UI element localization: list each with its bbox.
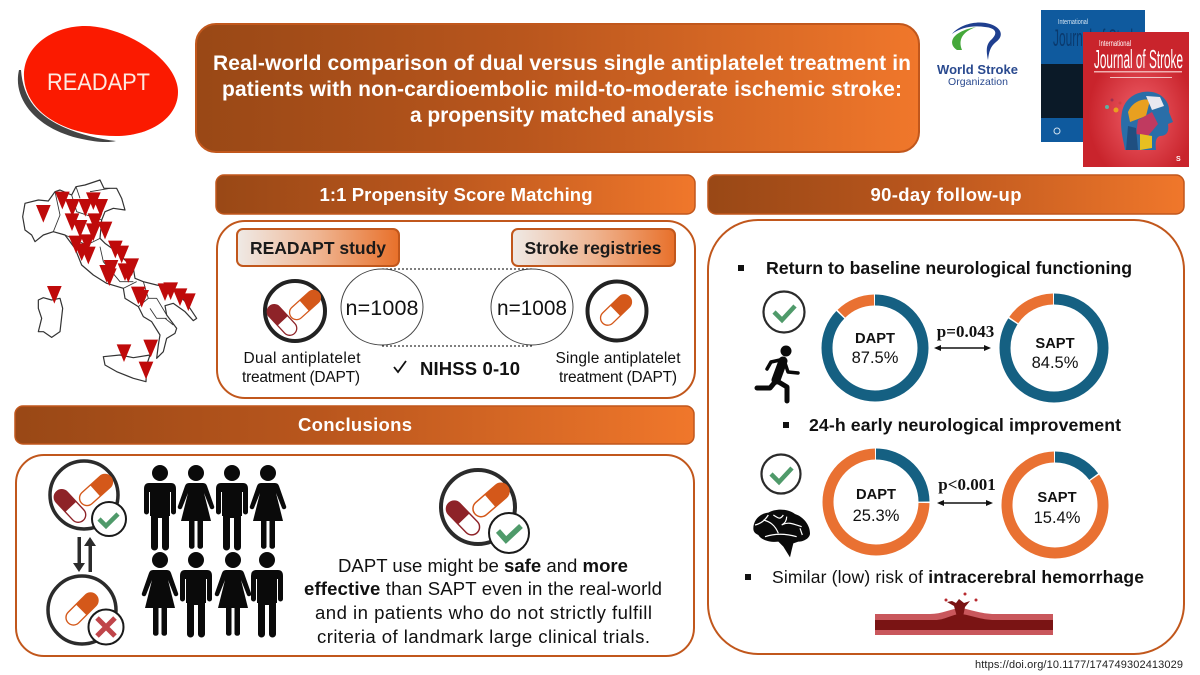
chart: DAPT return to baseline: DAPT bbox=[855, 331, 895, 347]
panel: matching bbox=[217, 221, 695, 398]
label: DAPT: treatment (DAPT) bbox=[242, 369, 360, 386]
icon: runner bbox=[757, 346, 798, 401]
matched cohorts: n=1008 bbox=[497, 297, 567, 320]
outcome heading: early improvement: 24-h early neurological improvement bbox=[809, 415, 1121, 435]
icon: single pill bbox=[588, 282, 646, 340]
tag: READAPT study: READAPT study bbox=[250, 238, 386, 258]
journal cover: red bbox=[1083, 32, 1189, 167]
heading: follow-up: 90-day follow-up bbox=[870, 184, 1022, 205]
conclusion text: DAPT use might be safe and more bbox=[338, 555, 628, 576]
chart: SAPT return to baseline: 84.5% bbox=[1032, 354, 1079, 372]
label: DAPT bbox=[242, 350, 361, 386]
icon: group of patients bbox=[142, 465, 286, 638]
logo: World Stroke Organization: World Stroke bbox=[937, 62, 1018, 77]
icon: vessel hemorrhage bbox=[875, 592, 1053, 635]
icon: check bbox=[762, 454, 800, 494]
heading: conclusions bbox=[15, 406, 694, 444]
map outline bbox=[23, 180, 197, 382]
conclusion text: effective than SAPT even in the real-world bbox=[304, 578, 662, 599]
logo: READAPT bbox=[18, 26, 178, 142]
chart: DAPT early improvement: 25.3% bbox=[853, 507, 900, 525]
DOI reference: https://doi.org/10.1177/174749302413029 bbox=[975, 659, 1183, 671]
heading: conclusions: Conclusions bbox=[298, 414, 412, 435]
journal cover: blue bbox=[1041, 10, 1145, 142]
tag: READAPT study bbox=[237, 229, 399, 266]
icon: dual pills with check bbox=[50, 461, 126, 536]
icon: dual pills with check bbox=[441, 470, 529, 553]
heading: propensity score matching: 1:1 Propensity Score Matching bbox=[320, 184, 592, 205]
label: single antiplatelet: Single antiplatelet bbox=[556, 350, 681, 367]
comparison: p<0.001: p<0.001 bbox=[938, 475, 996, 494]
outcome text: intracerebral hemorrhage: Similar (low) risk of intracerebral hemorrhage bbox=[772, 567, 1144, 587]
matched cohorts: n=1008 bbox=[346, 296, 419, 320]
comparison: p=0.043: p=0.043 bbox=[937, 322, 994, 341]
logo: World Stroke Organization: Organization bbox=[948, 76, 1008, 88]
icon: colourful puzzle head bbox=[1105, 92, 1173, 150]
icon: dual pills bbox=[264, 281, 325, 341]
heading: follow-up bbox=[708, 175, 1184, 214]
label: single antiplatelet bbox=[556, 350, 681, 386]
chart: DAPT early improvement bbox=[828, 454, 924, 550]
icon: single pill with cross bbox=[48, 576, 124, 644]
tag: stroke registries: Stroke registries bbox=[524, 238, 662, 258]
title banner: Real-world comparison of dual versus single antiplatelet treatment in bbox=[213, 52, 911, 75]
logo: READAPT: READAPT bbox=[47, 69, 150, 96]
conclusion text: criteria of landmark large clinical trials. bbox=[317, 626, 650, 647]
comparison: p=0.043 bbox=[934, 322, 994, 351]
panel: conclusions bbox=[16, 455, 694, 656]
journal cover: red: International bbox=[1099, 39, 1131, 48]
conclusion text: and in patients who do not strictly fulfill bbox=[315, 602, 652, 623]
journal cover: blue: International bbox=[1058, 19, 1088, 26]
matched cohorts bbox=[341, 269, 573, 346]
logo: World Stroke Organization bbox=[937, 22, 1018, 88]
chart: SAPT return to baseline: SAPT bbox=[1035, 336, 1075, 352]
chart: SAPT early improvement: 15.4% bbox=[1034, 509, 1081, 527]
chart: DAPT return to baseline: 87.5% bbox=[852, 349, 899, 367]
title banner: patients with non-cardioembolic mild-to-moderate ischemic stroke: bbox=[222, 78, 902, 101]
conclusion text bbox=[304, 555, 662, 647]
chart: SAPT early improvement: SAPT bbox=[1037, 490, 1077, 506]
tag: stroke registries bbox=[512, 229, 675, 266]
heading: propensity score matching bbox=[216, 175, 695, 214]
outcome heading: return to baseline: Return to baseline neurological functioning bbox=[766, 258, 1132, 278]
icon: brain bbox=[753, 510, 810, 557]
map of Italy with centre markers bbox=[23, 180, 197, 382]
chart: SAPT early improvement bbox=[1007, 457, 1103, 553]
criterion: NIHSS: NIHSS 0-10 bbox=[420, 358, 520, 379]
title banner: a propensity matched analysis bbox=[410, 104, 714, 127]
label: single antiplatelet: treatment (DAPT) bbox=[559, 369, 677, 386]
title banner bbox=[196, 24, 919, 152]
chart: DAPT early improvement: DAPT bbox=[856, 487, 896, 503]
comparison: p<0.001 bbox=[937, 475, 996, 506]
chart: SAPT return to baseline bbox=[1005, 299, 1103, 397]
chart: DAPT return to baseline bbox=[827, 300, 923, 396]
label: DAPT: Dual antiplatelet bbox=[244, 350, 361, 367]
panel: follow-up bbox=[708, 220, 1184, 654]
icon: check bbox=[764, 292, 804, 332]
arrows: switch between treatments bbox=[73, 537, 96, 572]
journal cover: red: S bbox=[1176, 156, 1181, 163]
